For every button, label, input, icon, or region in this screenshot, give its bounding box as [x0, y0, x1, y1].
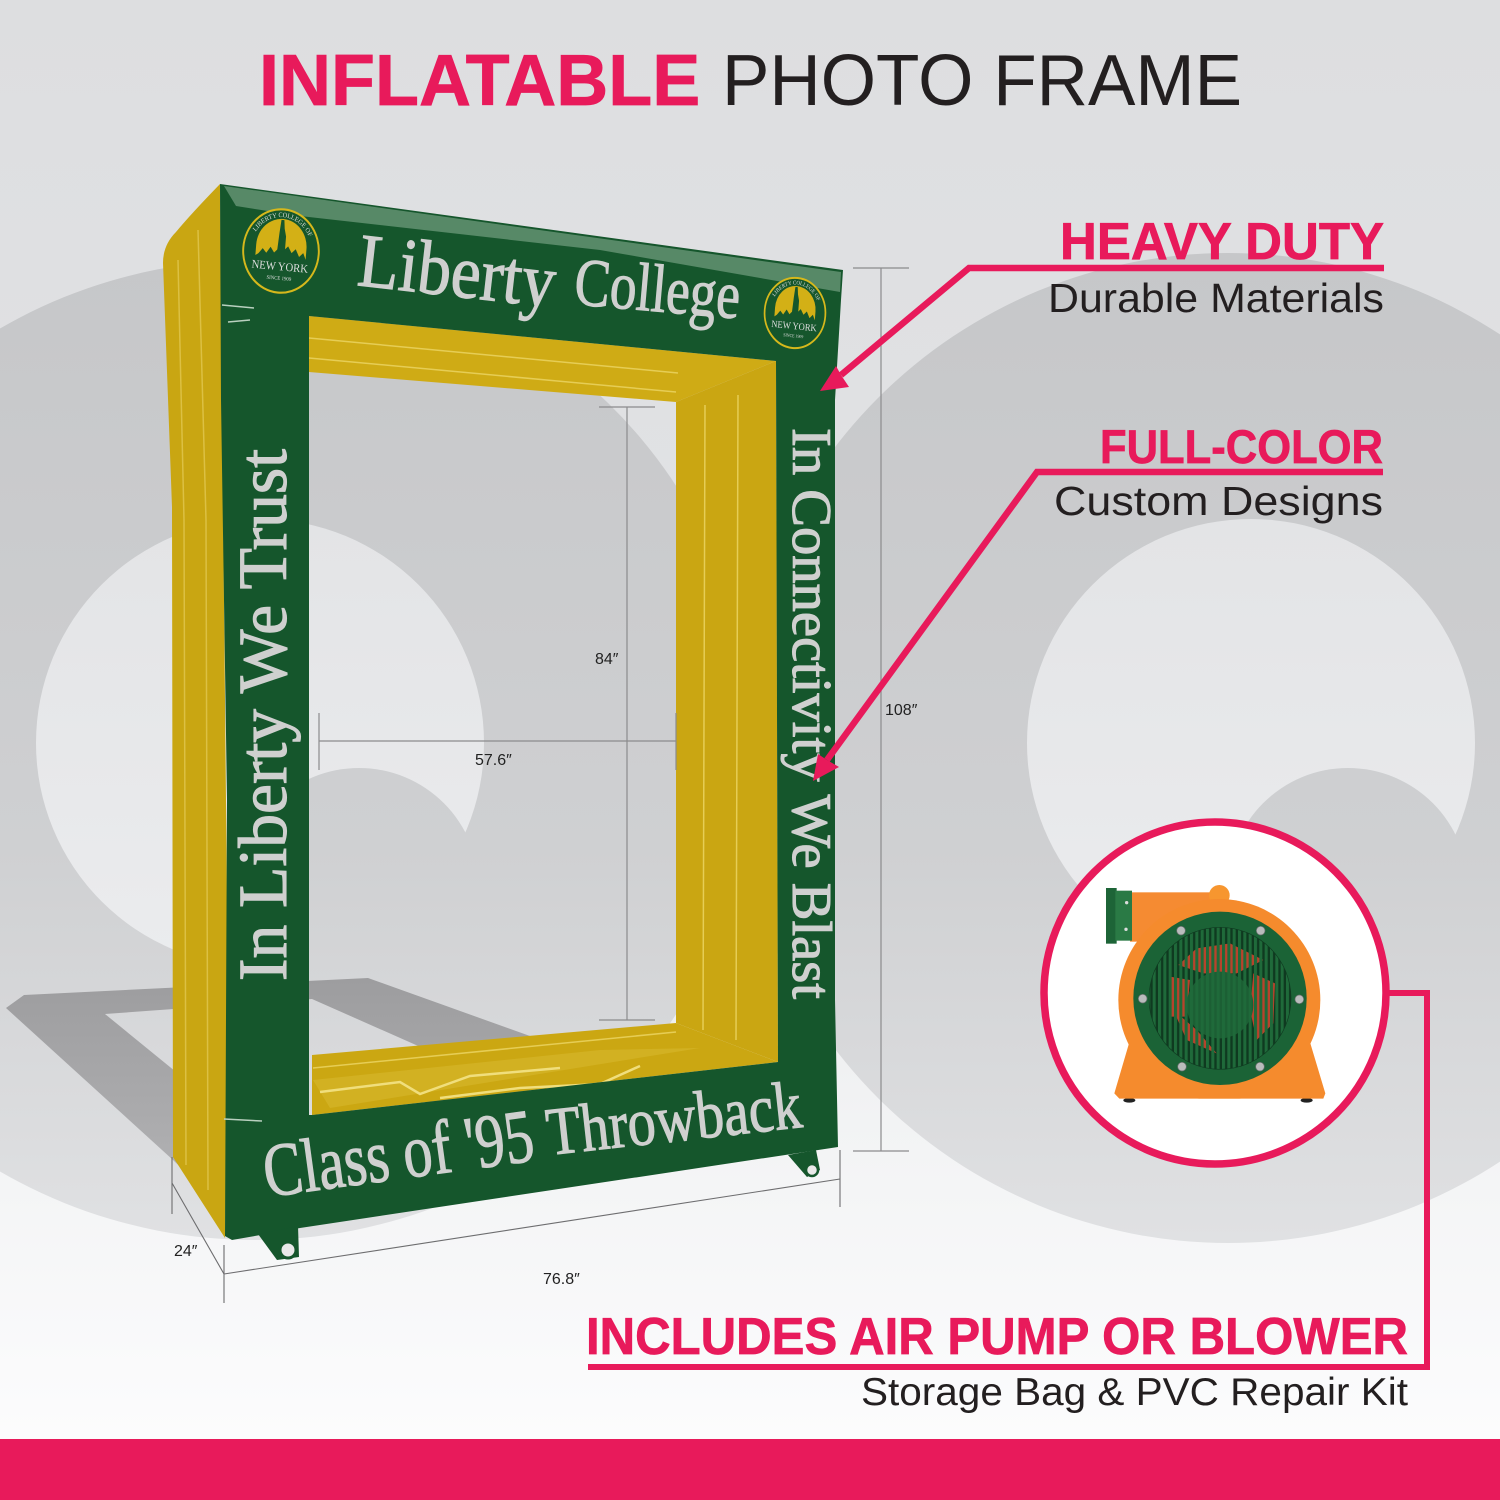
foot left [258, 1226, 299, 1260]
foot right [788, 1150, 820, 1177]
logo left: NEW YORK [251, 258, 308, 276]
dimension: 76.8 inch width: 76.8″ [543, 1271, 580, 1288]
callout: full color: Custom Designs [1054, 478, 1383, 524]
panel glints [222, 305, 262, 1121]
logo left: LIBERTY COLLEGE OF [252, 212, 312, 236]
left column text: In Liberty We Trust [225, 449, 301, 981]
logo right [764, 276, 826, 350]
top edge highlight [224, 186, 841, 292]
dimension: 76.8 inch width [224, 1150, 840, 1303]
callout: heavy duty: Durable Materials [1048, 275, 1384, 321]
bottom inner yellow lining [312, 1023, 778, 1115]
dimension: 84 inch height [595, 407, 655, 1020]
callout: full color [813, 420, 1383, 781]
glossy lower lining [313, 1048, 700, 1108]
callout: heavy duty [820, 213, 1384, 391]
callout: air pump: Storage Bag & PVC Repair Kit [861, 1371, 1408, 1414]
frame ground shadow [6, 978, 530, 1215]
connector: blower to callout [588, 993, 1427, 1367]
dimension: 108 inch height: 108″ [885, 702, 918, 719]
callout: air pump [586, 1308, 1408, 1414]
title: INFLATABLE [259, 41, 700, 121]
logo left: SINCE 1909 [266, 274, 292, 283]
dimension: 84 inch height: 84″ [595, 651, 619, 668]
callout: full color: FULL-COLOR [1100, 420, 1383, 473]
bottom banner text [258, 1066, 805, 1214]
dimension: 24 inch depth: 24″ [174, 1243, 198, 1260]
arrow: full color [813, 472, 1383, 781]
arrow: heavy duty [820, 268, 1384, 391]
logo right: LIBERTY COLLEGE OF [772, 280, 820, 300]
top banner text [354, 218, 744, 333]
top banner text: Liberty [354, 218, 560, 324]
bottom band [0, 1439, 1500, 1500]
dimension: 24 inch depth [172, 1157, 224, 1274]
callout: heavy duty: HEAVY DUTY [1060, 213, 1384, 271]
title second part: PHOTO FRAME [722, 41, 1242, 121]
inflatable frame [163, 184, 843, 1260]
top inner yellow lining [309, 316, 776, 402]
green front panel [220, 184, 843, 1240]
blower inset [1044, 822, 1386, 1164]
dimension: 57.6 inch width [319, 713, 676, 770]
bottom banner text: Class of '95 [258, 1094, 539, 1214]
callout: air pump: INCLUDES AIR PUMP OR BLOWER [586, 1308, 1408, 1366]
dimension: 57.6 inch width: 57.6″ [475, 752, 512, 769]
left yellow side [163, 184, 228, 1238]
logo right: NEW YORK [771, 319, 817, 335]
right inner yellow lining [676, 361, 778, 1062]
blower illustration [1106, 885, 1325, 1103]
logo left [242, 208, 320, 294]
top banner text: College [572, 243, 744, 333]
dimension: 108 inch height [853, 268, 918, 1151]
logo right: SINCE 1909 [783, 332, 803, 339]
bottom banner text: Throwback [542, 1066, 805, 1170]
right column text: In Connectivity We Blast [780, 428, 842, 999]
